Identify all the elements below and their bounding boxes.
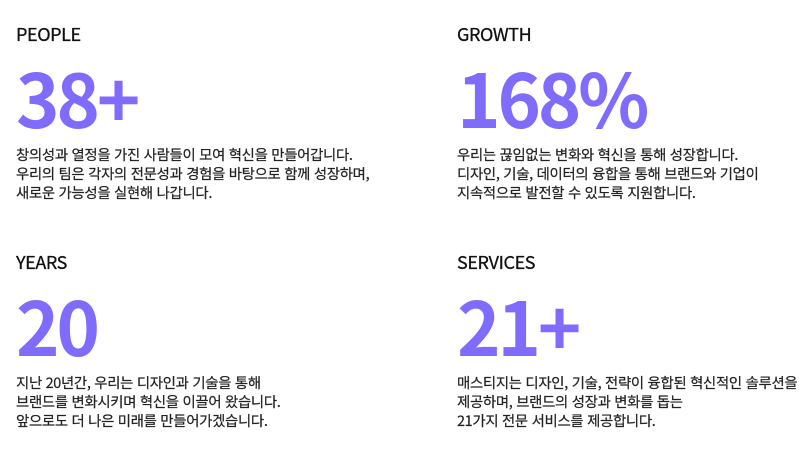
stat: 20: 20 xyxy=(16,271,97,378)
text: services description: 21가지 전문 서비스를 제공합니다. xyxy=(457,410,656,431)
text: people description xyxy=(16,144,369,203)
panel: services xyxy=(457,249,797,431)
panel: growth xyxy=(457,21,759,203)
heading: services: SERVICES xyxy=(457,249,535,275)
stat: 38+: 38+ xyxy=(16,43,137,150)
text: years description xyxy=(16,372,280,431)
text: services description xyxy=(457,372,797,431)
heading: growth: GROWTH xyxy=(457,21,531,47)
text: growth description: 지속적으로 발전할 수 있도록 지원합니다. xyxy=(457,182,696,203)
stat: 168%: 168% xyxy=(457,43,646,150)
text: services description: 제공하며, 브랜드의 성장과 변화를 돕는 xyxy=(457,391,683,412)
text: people description: 우리의 팀은 각자의 전문성과 경험을 바탕으로 함께 성장하며, xyxy=(16,163,369,184)
text: people description: 창의성과 열정을 가진 사람들이 모여 혁신을 만들어갑니다. xyxy=(16,144,353,165)
text: people description: 새로운 가능성을 실현해 나갑니다. xyxy=(16,182,212,203)
stat: 21+: 21+ xyxy=(457,271,578,378)
text: years description: 지난 20년간, 우리는 디자인과 기술을 통해 xyxy=(16,372,261,393)
text: growth description: 우리는 끊임없는 변화와 혁신을 통해 성장합니다. xyxy=(457,144,738,165)
text: services description: 매스티지는 디자인, 기술, 전략이 융합된 혁신적인 솔루션을 xyxy=(457,372,797,393)
text: years description: 앞으로도 더 나은 미래를 만들어가겠습니다. xyxy=(16,410,268,431)
panel: people xyxy=(16,21,369,203)
text: growth description xyxy=(457,144,759,203)
text: years description: 브랜드를 변화시키며 혁신을 이끌어 왔습니다. xyxy=(16,391,280,412)
heading: years: YEARS xyxy=(16,249,67,275)
heading: people: PEOPLE xyxy=(16,21,81,47)
panel: years xyxy=(16,249,280,431)
text: growth description: 디자인, 기술, 데이터의 융합을 통해 브랜드와 기업이 xyxy=(457,163,759,184)
